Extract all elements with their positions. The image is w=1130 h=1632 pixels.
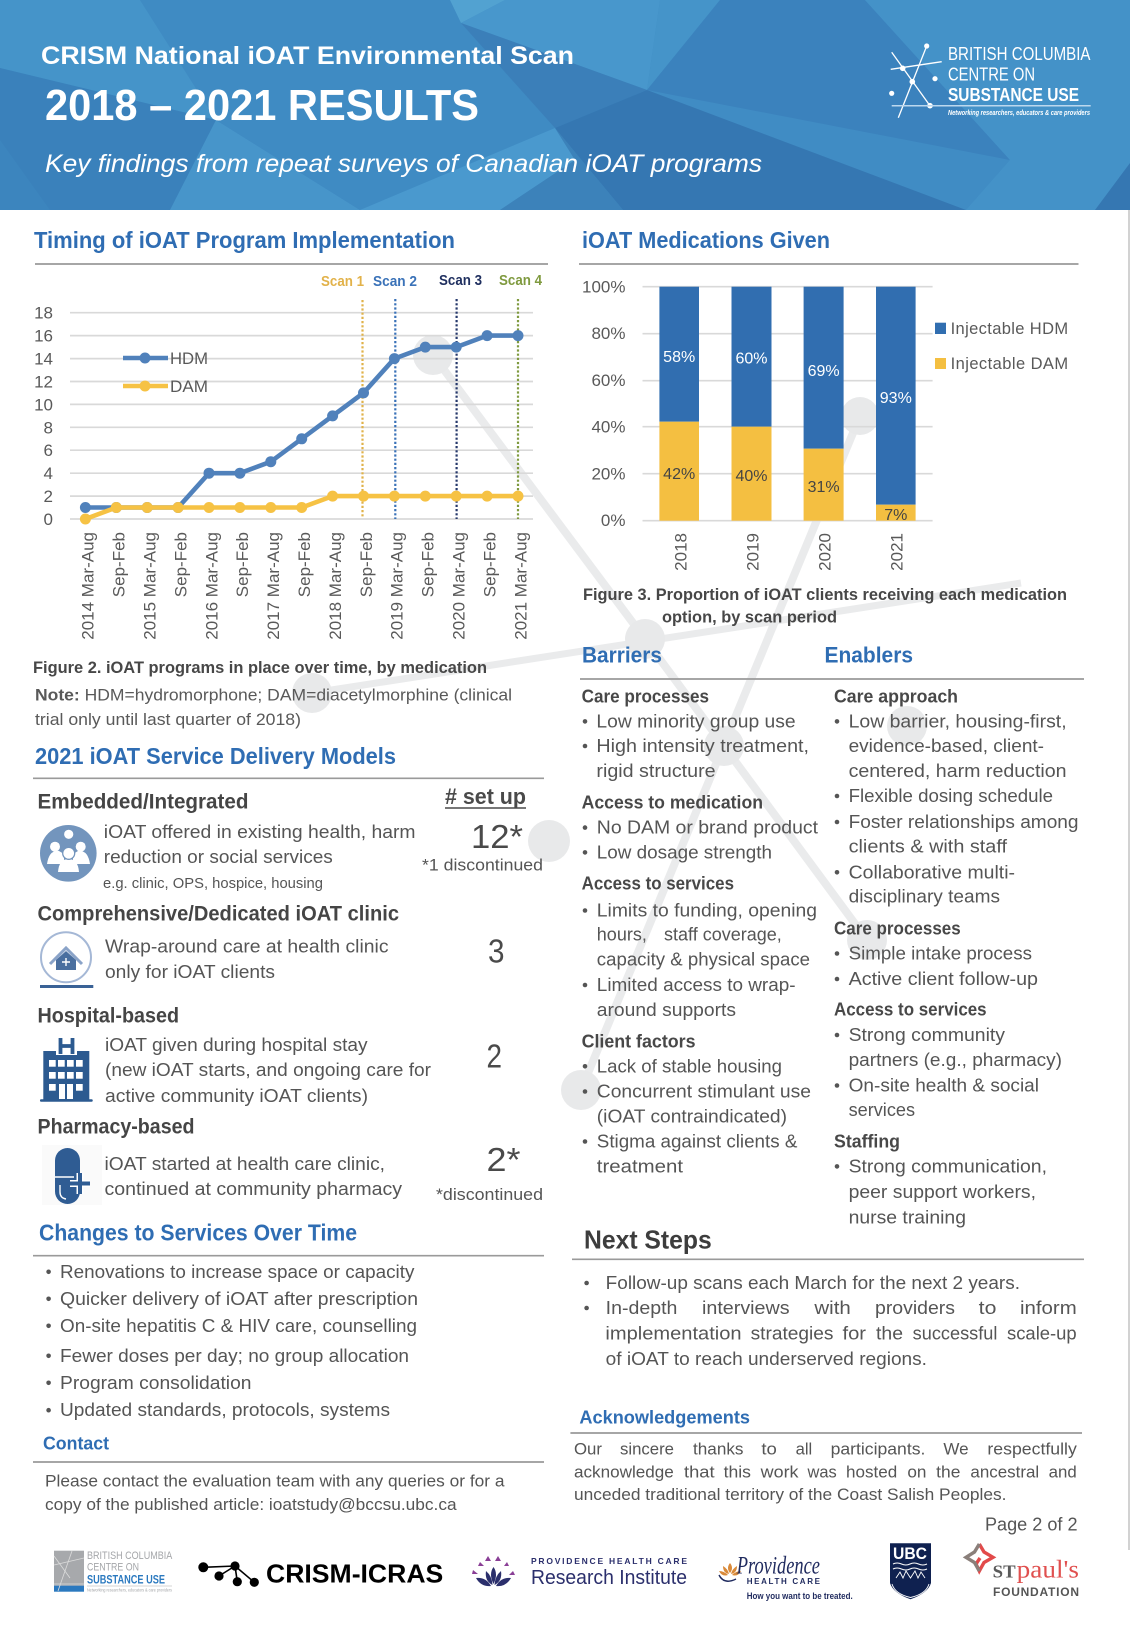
contact text: copy of the published article: ioatstudy@bccsu.ubc.ca (45, 1496, 457, 1514)
list: next steps: for (842, 1323, 866, 1343)
list: barriers: Access to services (582, 874, 734, 894)
list: enablers: Low barrier, housing-first, (849, 711, 1067, 731)
year labels: 2020 (816, 533, 834, 571)
list: enablers (834, 686, 1078, 1228)
logo: UBC crest: UBC (893, 1544, 927, 1563)
icon: hospital building (40, 1038, 93, 1102)
list: barriers: capacity & physical space (597, 949, 810, 969)
list: next steps: the (876, 1323, 903, 1343)
list: enablers: services (849, 1100, 915, 1120)
scan labels: Scan 4 (499, 273, 542, 289)
year labels: 2021 (888, 533, 906, 571)
list: changes to services: Program consolidation (60, 1373, 252, 1393)
acknowledgements text: Our (574, 1440, 603, 1458)
scan labels (321, 273, 542, 290)
model: embedded/integrated: reduction or social services (104, 847, 333, 867)
list: changes to services: On-site hepatitis C & HIV care, counselling (60, 1316, 417, 1336)
list: enablers: Flexible dosing schedule (849, 786, 1053, 806)
x axis labels: Sep-Feb (233, 532, 252, 597)
model: pharmacy-based: *discontinued (436, 1185, 543, 1204)
list: barriers: Low dosage strength (597, 842, 772, 862)
y axis percentages: 100% (582, 278, 626, 296)
acknowledgements text: hosted (846, 1463, 897, 1481)
list: next steps: to (979, 1298, 996, 1318)
bar 2019: 60% (735, 350, 768, 368)
y axis labels: 18 (34, 304, 53, 323)
icon: clinic house (40, 932, 93, 988)
scan markers (362, 299, 518, 519)
bar 2021: 7% (884, 507, 907, 524)
list: barriers: treatment (597, 1156, 683, 1176)
bar 2020 (804, 287, 844, 521)
bar 2018 (659, 287, 699, 521)
x axis labels: Sep-Feb (480, 532, 499, 597)
acknowledgements text: work (760, 1463, 799, 1481)
list: next steps: Follow-up scans each March for the next 2 years. (606, 1273, 1020, 1293)
acknowledgements text: respectfully (987, 1440, 1078, 1458)
logo: Providence Health Care: Providence (736, 1552, 820, 1579)
y axis labels: 4 (44, 464, 53, 483)
list: enablers: centered, harm reduction (849, 761, 1067, 781)
logo: BC Centre on Substance Use (889, 43, 1091, 118)
model: comprehensive/dedicated clinic: only for iOAT clients (105, 962, 275, 982)
list: barriers: rigid structure (596, 761, 716, 781)
list: enablers: On-site health & social (849, 1076, 1039, 1096)
list: enablers: Staffing (834, 1131, 900, 1151)
model: hospital-based: active community iOAT clients) (105, 1086, 368, 1106)
bar 2020: 69% (808, 363, 840, 380)
acknowledgements text: unceded traditional territory of the Coast Salish Peoples. (574, 1486, 1006, 1504)
list: barriers: (iOAT contraindicated) (597, 1107, 787, 1127)
model: embedded/integrated: e.g. clinic, OPS, hospice, housing (103, 875, 323, 892)
list: barriers: Limits to funding, opening (597, 900, 817, 920)
list: next steps: strategies (751, 1323, 834, 1343)
list: next steps: with (813, 1298, 851, 1318)
list: enablers: Simple intake process (849, 944, 1032, 964)
acknowledgements text: that (684, 1463, 715, 1481)
acknowledgements text: acknowledge (574, 1463, 674, 1481)
model: hospital-based: Hospital-based (38, 1005, 179, 1028)
list: enablers: Collaborative multi- (849, 862, 1015, 882)
x axis labels: Sep-Feb (295, 532, 314, 597)
model: comprehensive/dedicated clinic: Wrap-around care at health clinic (105, 937, 388, 957)
logo: Providence Research Institute (472, 1556, 687, 1589)
bar legend: Injectable DAM (951, 355, 1068, 373)
list: next steps (584, 1273, 1077, 1369)
y axis labels: 10 (34, 395, 53, 414)
list: barriers: Client factors (582, 1032, 696, 1052)
page number: Page 2 of 2 (985, 1515, 1078, 1535)
y axis labels: 16 (34, 327, 53, 346)
subtitle: Key findings from repeat surveys of Canadian iOAT programs (45, 150, 762, 178)
logo: BC Centre on Substance Use: Networking researchers, educators & care providers (948, 110, 1090, 117)
list: next steps: In-depth (606, 1298, 677, 1318)
list: next steps: inform (1020, 1298, 1077, 1318)
x axis labels: 2018 Mar-Aug (326, 532, 345, 640)
list: next steps: interviews (702, 1298, 790, 1318)
model: pharmacy-based: iOAT started at health care clinic, (104, 1154, 385, 1174)
y axis labels (34, 304, 53, 529)
acknowledgements text: ancestral (970, 1463, 1039, 1481)
chart legend: HDM (170, 349, 208, 368)
figure 2 caption: Note: HDM=hydromorphone; DAM=diacetylmorphine (clinical (35, 686, 512, 705)
stacked bar chart: medications (582, 278, 1068, 571)
x axis labels: 2016 Mar-Aug (202, 532, 221, 640)
list: next steps: of iOAT to reach underserved regions. (606, 1349, 927, 1369)
heading: next steps: Next Steps (584, 1224, 712, 1254)
column heading: number set up: # set up (445, 784, 526, 809)
contact text: Please contact the evaluation team with any queries or for a (45, 1473, 505, 1491)
list: barriers: Stigma against clients & (597, 1132, 797, 1152)
list: next steps: successful (913, 1323, 997, 1343)
line chart: iOAT programs over time (34, 273, 542, 640)
model: comprehensive/dedicated clinic (38, 903, 504, 988)
list: enablers: peer support workers, (849, 1182, 1036, 1202)
x axis labels: 2014 Mar-Aug (79, 532, 98, 640)
logo: Providence Health Care: How you want to be treated. (747, 1591, 853, 1602)
y axis labels: 6 (44, 441, 53, 460)
model: embedded/integrated (38, 790, 543, 892)
logo: Providence Health Care: HEALTH CARE (747, 1577, 821, 1586)
model: comprehensive/dedicated clinic: 3 (488, 933, 504, 970)
y axis percentages: 80% (591, 324, 626, 343)
model: comprehensive/dedicated clinic: Comprehensive/Dedicated iOAT clinic (38, 903, 399, 926)
y axis labels: 2 (44, 487, 53, 506)
y axis labels: 14 (34, 350, 53, 369)
bar legend (935, 320, 1068, 373)
acknowledgements text: on (907, 1463, 926, 1481)
list: barriers: Low minority group use (596, 711, 796, 731)
logo: St Paul's Foundation: FOUNDATION (993, 1585, 1079, 1599)
list: changes to services: Updated standards, protocols, systems (60, 1400, 390, 1420)
list: enablers: evidence-based, client- (849, 736, 1044, 756)
list: barriers (582, 686, 818, 1176)
y axis percentages (582, 278, 626, 530)
logo: St Paul's Foundation: ST (993, 1562, 1016, 1582)
year labels (672, 533, 906, 571)
list: barriers: Lack of stable housing (597, 1056, 782, 1076)
list: enablers: Foster relationships among (849, 812, 1078, 832)
title: scan name: CRISM National iOAT Environmental Scan (41, 42, 574, 70)
list: enablers: Care approach (834, 686, 958, 706)
logo: BCCSU footer: CENTRE ON (87, 1562, 139, 1574)
title: results: 2018 – 2021 RESULTS (45, 81, 479, 130)
y axis percentages: 40% (591, 418, 626, 436)
list: enablers: Access to services (834, 1000, 987, 1020)
list: barriers: Concurrent stimulant use (597, 1082, 811, 1102)
model: hospital-based: (new iOAT starts, and ongoing care for (105, 1060, 431, 1080)
figure 3 caption: option, by scan period (662, 609, 837, 627)
series: HDM (80, 330, 524, 513)
scan labels: Scan 3 (439, 273, 482, 289)
x axis labels: 2015 Mar-Aug (140, 532, 160, 640)
x axis labels: Sep-Feb (171, 532, 190, 597)
heading: barriers and enablers (580, 642, 1084, 679)
contact text (45, 1473, 505, 1514)
logo: BC Centre on Substance Use: BRITISH COLUMBIA (948, 44, 1090, 64)
logo: Providence Research Institute: PROVIDENCE HEALTH CARE (531, 1556, 687, 1566)
list: next steps: scale-up (1007, 1323, 1077, 1343)
chart legend: DAM (170, 377, 208, 396)
x axis labels: Sep-Feb (110, 532, 129, 597)
y axis labels: 12 (34, 372, 53, 392)
bar 2019: 40% (735, 468, 768, 485)
model: embedded/integrated: Embedded/Integrated (38, 790, 248, 813)
acknowledgements text: to (761, 1440, 777, 1458)
x axis labels: 2017 Mar-Aug (264, 532, 283, 640)
acknowledgements text: all (796, 1440, 812, 1458)
acknowledgements text: thanks (693, 1440, 744, 1458)
heading: changes to services: Changes to Services Over Time (39, 1220, 357, 1246)
heading: medications: iOAT Medications Given (582, 227, 830, 253)
heading: timing: Timing of iOAT Program Implementation (34, 227, 455, 253)
list: enablers: Active client follow-up (849, 969, 1038, 989)
list: barriers: staff coverage, (664, 924, 782, 944)
heading: acknowledgements: Acknowledgements (579, 1406, 750, 1427)
acknowledgements text: this (724, 1463, 751, 1481)
list: enablers: Strong communication, (849, 1156, 1047, 1176)
model: hospital-based: 2 (486, 1038, 502, 1075)
bar 2021: 93% (880, 390, 912, 407)
acknowledgements text: sincere (620, 1440, 674, 1458)
figure 2 caption: Figure 2. iOAT programs in place over time, by medication (33, 659, 487, 677)
background network watermark (292, 335, 1021, 1110)
model: pharmacy-based: Pharmacy-based (38, 1116, 194, 1138)
bar 2018: 42% (663, 466, 695, 483)
logo: UBC crest (890, 1543, 931, 1599)
list: next steps: providers (875, 1298, 955, 1318)
figure 2 caption (33, 659, 512, 729)
y axis percentages: 20% (591, 464, 626, 484)
list: barriers: hours, (597, 924, 647, 944)
bar 2020: 31% (808, 479, 840, 496)
logo: BC Centre on Substance Use: SUBSTANCE USE (948, 85, 1079, 105)
model: embedded/integrated: 12* (471, 818, 523, 855)
model: pharmacy-based: 2* (486, 1141, 521, 1178)
heading: barriers and enablers: Enablers (824, 642, 913, 668)
bar 2021 (876, 287, 916, 524)
bar 2019 (732, 287, 772, 521)
x axis labels: Sep-Feb (357, 532, 376, 597)
list: enablers: Care processes (834, 918, 961, 938)
model: pharmacy-based (38, 1116, 543, 1205)
series: DAM (80, 491, 524, 524)
acknowledgements text: We (943, 1440, 969, 1458)
scan labels: Scan 1 (321, 274, 364, 290)
logo: CRISM-ICRAS: CRISM-ICRAS (266, 1559, 443, 1589)
heading: barriers and enablers: Barriers (582, 642, 662, 668)
logo: St Paul's Foundation: paul's (1017, 1557, 1079, 1584)
year labels: 2019 (744, 533, 762, 571)
icon: group of people (40, 825, 97, 882)
logo: BCCSU footer: BRITISH COLUMBIA (87, 1550, 173, 1562)
list: barriers: Limited access to wrap- (597, 975, 796, 995)
acknowledgements text: was (807, 1463, 837, 1481)
bar legend: Injectable HDM (951, 320, 1068, 338)
list: enablers: disciplinary teams (849, 886, 1000, 906)
x axis labels: 2021 Mar-Aug (511, 532, 530, 640)
logo: Providence Health Care (719, 1552, 853, 1602)
model: hospital-based (38, 1005, 502, 1106)
page edge line (1128, 210, 1130, 1550)
list: changes to services: Fewer doses per day; no group allocation (60, 1346, 409, 1366)
model: embedded/integrated: *1 discontinued (422, 856, 543, 875)
list: barriers: No DAM or brand product (597, 818, 818, 838)
x axis labels: Sep-Feb (419, 532, 438, 597)
heading: service delivery models: 2021 iOAT Service Delivery Models (35, 743, 396, 769)
list: enablers: nurse training (849, 1208, 966, 1228)
y axis percentages: 60% (591, 371, 626, 390)
model: embedded/integrated: iOAT offered in existing health, harm (104, 822, 416, 842)
list: enablers: partners (e.g., pharmacy) (849, 1050, 1062, 1070)
figure 3 caption: Figure 3. Proportion of iOAT clients receiving each medication (583, 586, 1067, 604)
list: changes to services: Quicker delivery of iOAT after prescription (60, 1289, 418, 1309)
header banner (0, 0, 1130, 210)
heading: contact: Contact (43, 1432, 109, 1453)
bar 2018: 58% (663, 349, 695, 366)
logo: BCCSU footer: Networking researchers, educators & care providers (87, 1588, 173, 1592)
list: barriers: Access to medication (582, 792, 763, 812)
logo: Providence Research Institute: Research Institute (531, 1567, 687, 1589)
scan labels: Scan 2 (373, 274, 417, 290)
logo: BCCSU footer (54, 1550, 173, 1592)
chart legend (123, 349, 208, 396)
x axis labels: 2020 Mar-Aug (450, 532, 468, 640)
figure 3 caption (583, 586, 1067, 627)
figure 2 caption: trial only until last quarter of 2018) (35, 710, 301, 729)
model: hospital-based: iOAT given during hospital stay (105, 1035, 368, 1055)
acknowledgements text: participants. (831, 1440, 925, 1458)
y axis labels: 8 (44, 418, 53, 437)
list: barriers: High intensity treatment, (596, 736, 809, 756)
x axis labels (79, 532, 530, 640)
icon: capsule with plus (42, 1145, 102, 1205)
model: pharmacy-based: continued at community pharmacy (104, 1179, 402, 1199)
list: next steps: implementation (605, 1323, 742, 1343)
logo: BCCSU footer: SUBSTANCE USE (87, 1574, 165, 1586)
list: barriers: Care processes (582, 686, 709, 706)
x axis labels: 2019 Mar-Aug (388, 532, 407, 640)
logo: BC Centre on Substance Use: CENTRE ON (948, 65, 1035, 85)
list: barriers: around supports (597, 1000, 736, 1020)
acknowledgements text: the (936, 1463, 960, 1481)
list: changes to services: Renovations to increase space or capacity (60, 1262, 414, 1282)
y axis percentages: 0% (601, 511, 626, 530)
logo: St Paul's Foundation (966, 1544, 1079, 1599)
list: enablers: clients & with staff (849, 837, 1008, 857)
list: changes to services (46, 1262, 418, 1420)
acknowledgements text: and (1049, 1463, 1077, 1481)
list: enablers: Strong community (849, 1025, 1005, 1045)
acknowledgements text (574, 1440, 1078, 1504)
year labels: 2018 (672, 533, 690, 571)
y axis labels: 0 (44, 510, 53, 529)
